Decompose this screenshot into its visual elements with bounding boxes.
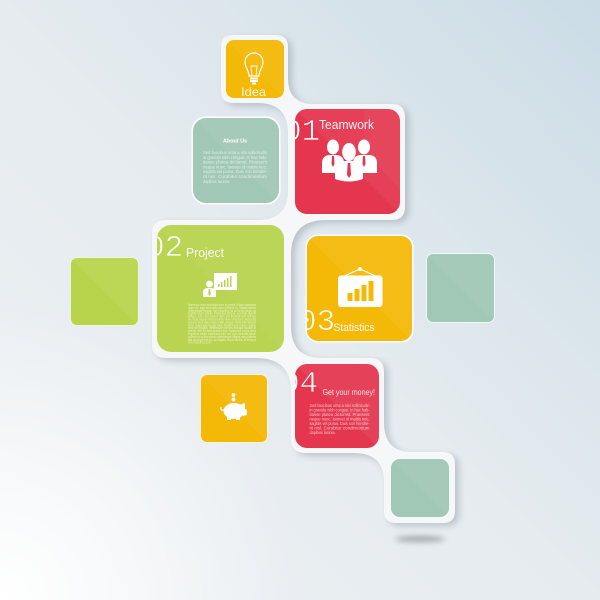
text block: project: Maecenas cursus sollicitudin lacus at gravida. Nullam malesuada xyxy=(188,303,256,307)
text block: project: sagittis turpis iaculis. Phasellus tempor, leo vitae blandit xyxy=(188,312,256,316)
white connecting ribbon xyxy=(152,35,455,523)
text block: project: dolor nisl, eget venenatis ipsum pulvinar eu. Nullam dictum xyxy=(188,306,256,310)
number 01: 01 xyxy=(283,115,320,150)
text block: about us: sagittis vel purus. Duis non hendre- xyxy=(203,169,268,174)
square: piggy bank xyxy=(200,374,268,443)
text block: about us: itasse platea dictumst. Praesent xyxy=(203,160,268,165)
icon: light bulb xyxy=(245,53,263,84)
number 02: 02 xyxy=(146,231,183,266)
label: idea: Idea xyxy=(241,85,266,99)
text block: project: pulvinar eu nullam dictum pellentesque fringilla nam pharetra xyxy=(188,335,256,339)
text block: project: eros vel fringilla. Vestibulum ultricies tristique iaculis, at xyxy=(188,326,256,330)
ground shadow xyxy=(395,536,445,542)
square: teal bottom xyxy=(391,459,449,517)
number 03: 03 xyxy=(298,305,335,340)
text block: project: nunc, malesuada feugiat nulla. Phasellus et. Donec congue xyxy=(188,323,256,327)
text block: about us xyxy=(203,150,268,184)
square: teal right xyxy=(426,253,495,323)
text block: project: posuere risus vitae ornare mattis congue. Morbi pellentesque xyxy=(188,320,256,324)
panel: get your money xyxy=(295,364,379,448)
ribbon shadow xyxy=(156,38,459,526)
text block: project: lobortis nibh, sit amet faucibus sem. Maecenas cursus lacus xyxy=(188,329,256,333)
panel: about us xyxy=(192,116,280,204)
text block: get your money: in gravida nibh congue. In hac hab- xyxy=(310,408,370,412)
icon: team of people xyxy=(322,140,377,182)
text block: get your money xyxy=(310,403,370,435)
text block: get your money: itasse platea dictumst. Praesent xyxy=(310,412,370,417)
text block: about us: dapibus lacinia. xyxy=(203,179,230,184)
text block: project: pellentesque fringilla. Nam pharetra nisl ac turpis rutrum, ac xyxy=(188,309,256,313)
square: green xyxy=(70,257,139,326)
text block: project: eros faucibus sem. xyxy=(188,341,212,345)
panel: project xyxy=(146,225,284,352)
text block: get your money: neque nunc, laoreet id mattis nec, xyxy=(310,416,370,422)
text block: get your money: sagittis vel purus. Duis non hendre- xyxy=(310,421,370,426)
text block: get your money: rit nisl. Curabitur condimentum xyxy=(310,426,370,430)
text block: about us: neque nunc, laoreet id mattis nec, xyxy=(203,164,267,169)
panel: teamwork xyxy=(295,109,400,214)
text block: project: tempus, ante enim pretium diam, non tincidunt odio velit nec xyxy=(188,315,256,319)
icon: hanging chart board xyxy=(338,267,382,307)
text block: project: dui. Nulla aliquam tincidunt tellus vitae consectetur. Maecenas xyxy=(188,318,256,322)
text block: about us: in gravida nibh congue. In hac hab- xyxy=(203,155,268,160)
text block: about us: rit nisl. Curabitur condimentum xyxy=(203,174,268,179)
heading: project: Project xyxy=(186,246,225,260)
text block: project xyxy=(188,303,256,345)
panel: idea xyxy=(226,40,284,99)
heading: about us: About Us xyxy=(223,138,247,144)
text block: project: at gravida nullam malesuada dolor nisl, eget venenatis ipsum xyxy=(188,332,256,336)
icon: piggy bank xyxy=(221,393,247,420)
text block: about us: Sed faucibus urna a nisi sollicitudin xyxy=(203,150,268,155)
text block: project: nisl ac turpis rutrum, ac sagittis turpis iaculis, at tempus xyxy=(188,338,256,342)
heading: statistics: Statistics xyxy=(334,322,375,334)
panel: statistics xyxy=(298,234,414,342)
icon: presenter with chart xyxy=(203,273,237,297)
number 04: 04 xyxy=(281,367,318,402)
text block: get your money: Sed faucibus urna a nisi sollicitudin xyxy=(310,403,370,408)
text block: get your money: dapibus lacinia. xyxy=(310,430,336,435)
heading: get your money: Get your money! xyxy=(322,388,375,397)
heading: teamwork: Teamwork xyxy=(319,117,374,132)
